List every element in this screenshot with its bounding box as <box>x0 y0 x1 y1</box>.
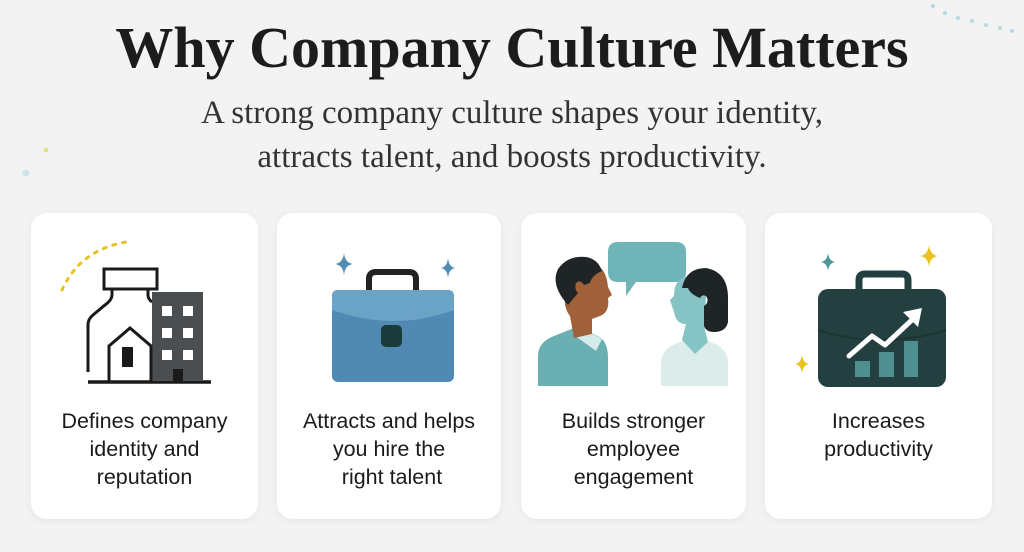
text: identity <box>61 409 228 489</box>
icon: building and bottle <box>62 242 211 382</box>
text: identity: identity and <box>90 437 199 461</box>
text: identity: Defines company <box>61 409 228 433</box>
text: engagement <box>562 409 705 489</box>
text: talent: you hire the <box>333 437 445 461</box>
text: engagement: employee <box>587 437 680 461</box>
panel: productivity <box>765 213 992 519</box>
text: talent: Attracts and helps <box>303 409 475 433</box>
text: identity: reputation <box>97 465 192 489</box>
icon: blue briefcase <box>332 253 455 382</box>
subtitle <box>201 95 823 175</box>
text: productivity: Increases <box>832 409 925 433</box>
subtitle: attracts talent, and boosts productivity. <box>257 139 767 175</box>
text: engagement: engagement <box>574 465 693 489</box>
text: talent <box>303 409 475 489</box>
text: productivity <box>824 409 933 461</box>
panel: talent <box>277 213 501 519</box>
text: productivity: productivity <box>824 437 933 461</box>
text: talent: right talent <box>342 465 442 489</box>
panel: identity <box>31 213 258 519</box>
icon: two people talking <box>538 242 728 386</box>
panel: engagement <box>521 213 746 519</box>
subtitle: A strong company culture shapes your identity, <box>201 95 823 131</box>
text: engagement: Builds stronger <box>562 409 705 433</box>
icon: growth briefcase <box>795 245 946 387</box>
title: Why Company Culture Matters <box>115 15 909 80</box>
decorative dots <box>22 4 1014 176</box>
